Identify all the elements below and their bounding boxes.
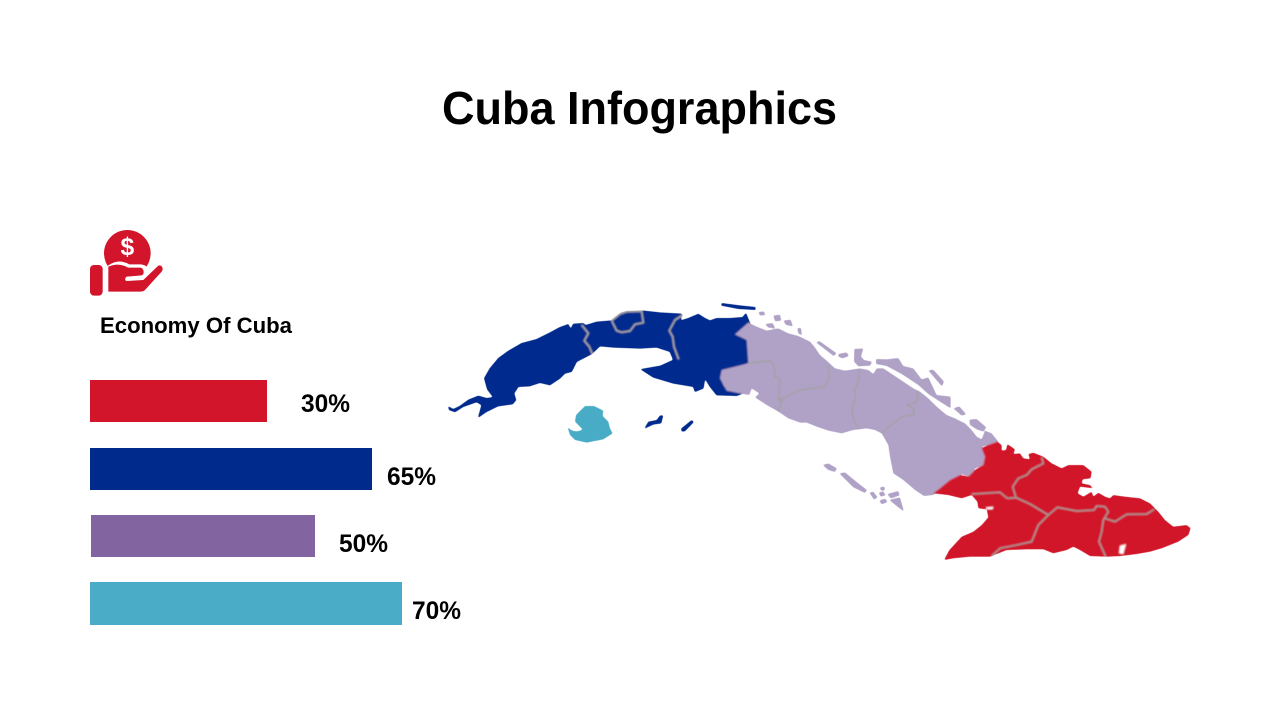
bar: 65%: 65% bbox=[387, 463, 436, 491]
bar: 50% bbox=[91, 515, 388, 558]
map region: Isla de la Juventud (teal) bbox=[567, 406, 613, 443]
bar: 30% bbox=[90, 380, 350, 422]
bar: 70%: 70% bbox=[412, 597, 461, 625]
map region: western Cuba (blue) bbox=[448, 303, 756, 432]
icon: hand holding dollar coin: $ bbox=[120, 234, 134, 261]
map of Cuba bbox=[448, 303, 1191, 560]
panel: economy of Cuba bbox=[90, 230, 461, 625]
bar: 70% bbox=[90, 582, 461, 625]
bar: 65% bbox=[90, 448, 436, 491]
map region: eastern Cuba (red) bbox=[933, 442, 1191, 560]
icon: hand holding dollar coin bbox=[90, 230, 166, 296]
map region: central Cuba (lavender) bbox=[720, 311, 998, 512]
bar: 30%: 30% bbox=[301, 390, 350, 418]
title: Cuba Infographics bbox=[442, 82, 837, 134]
bar: 50%: 50% bbox=[339, 530, 388, 558]
heading: economy of Cuba: Economy Of Cuba bbox=[100, 313, 293, 338]
